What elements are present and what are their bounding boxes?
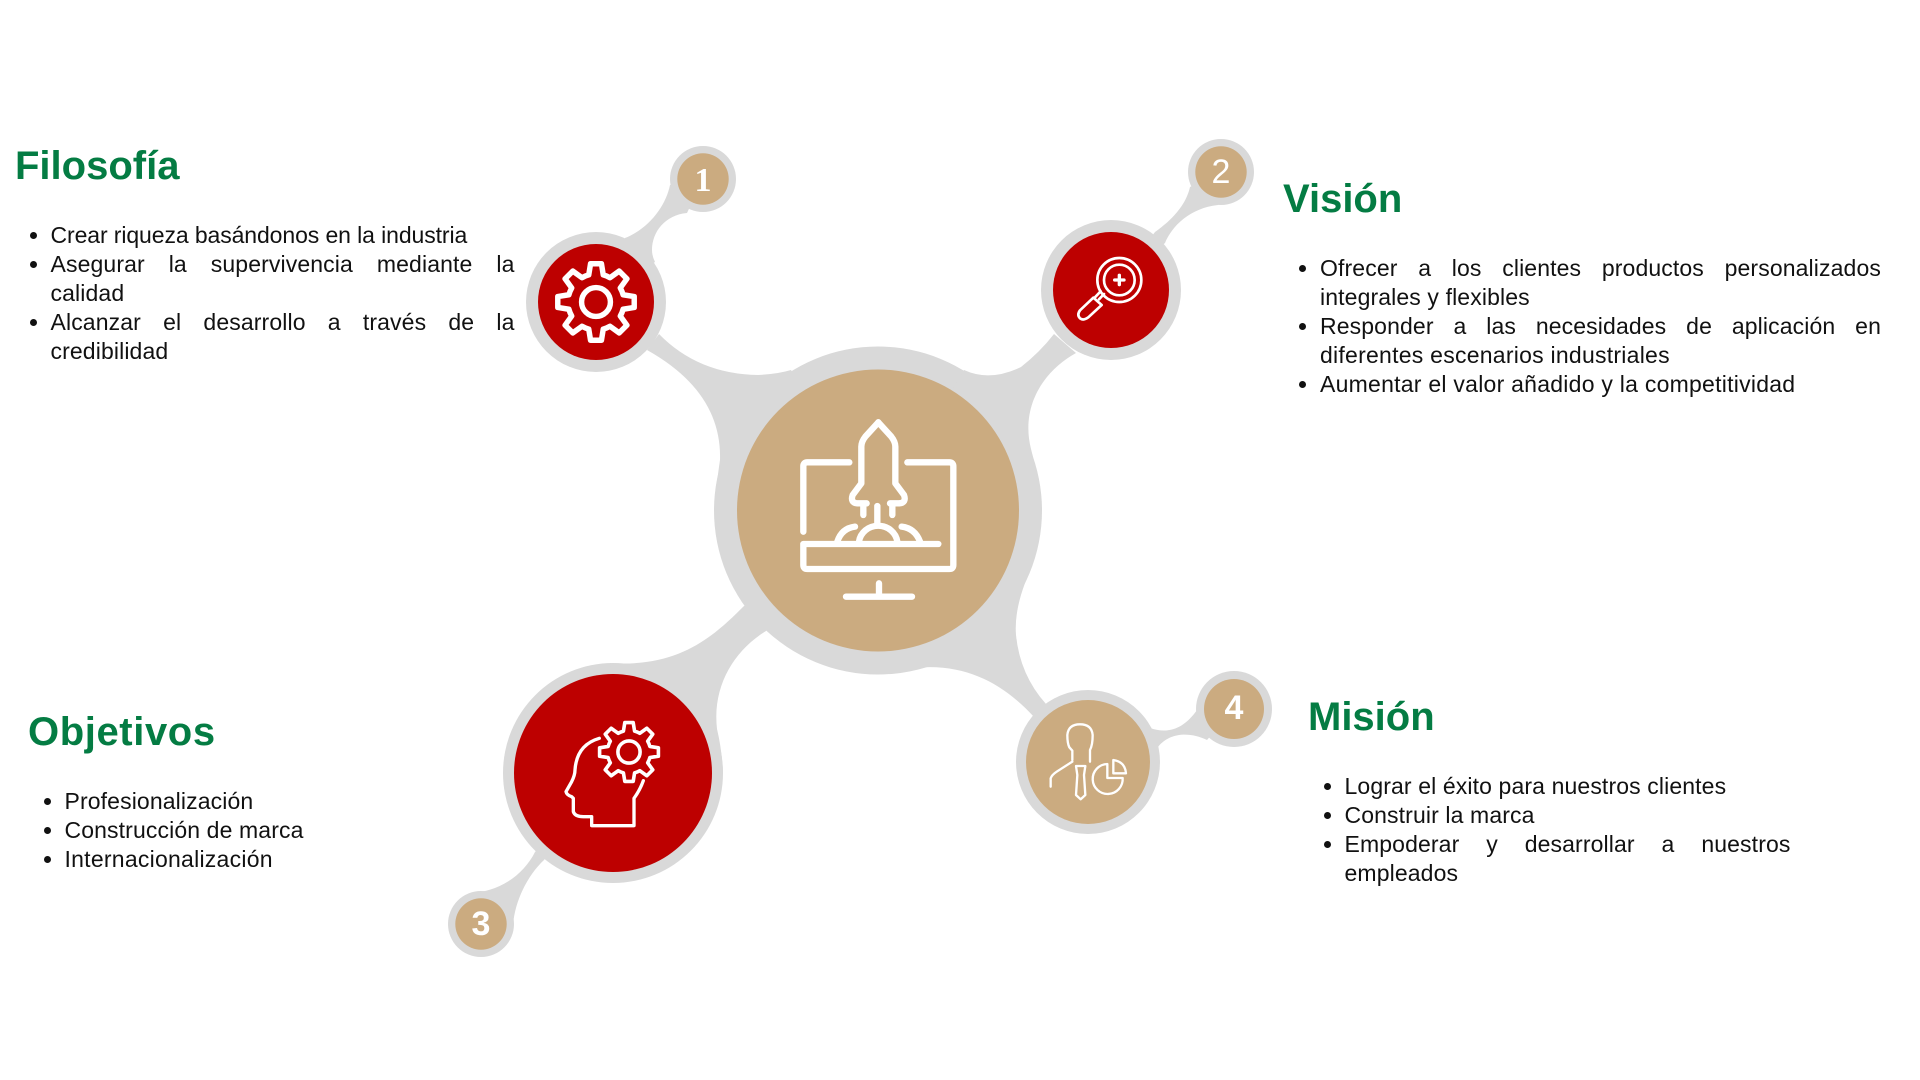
- text block: Visión list: Ofrecer a los clientes productos personalizados: [1320, 255, 1881, 281]
- heading: Objetivos: Objetivos: [28, 710, 216, 754]
- icon: rocket launching from monitor: [803, 422, 953, 597]
- text block: Filosofía list: [30, 222, 514, 364]
- icon: gear: [558, 264, 634, 340]
- heading: Visión: Visión: [1283, 177, 1402, 221]
- text block: Objetivos list: Profesionalización: [64, 788, 253, 814]
- icon: person and pie chart: [1051, 724, 1126, 799]
- node 2: magnifier icon: [1053, 232, 1169, 348]
- icon: head with gear: [566, 723, 658, 826]
- badge 3: 3: [472, 905, 490, 943]
- text block: Visión list: Responder a las necesidades de aplicación en: [1320, 313, 1881, 339]
- node 3: head with gear icon: [514, 674, 712, 872]
- badge 1: 1: [694, 162, 712, 199]
- icon: magnifying glass: [1078, 258, 1141, 319]
- node 4: businessperson with pie chart icon: [1026, 700, 1150, 824]
- grey connector network: [448, 139, 1272, 957]
- text block: Objetivos list: Internacionalización: [64, 846, 273, 872]
- text block: Misión list: Empoderar y desarrollar a nuestros: [1344, 831, 1790, 857]
- text block: Filosofía list: Crear riqueza basándonos en la industria: [50, 222, 467, 248]
- badge 4: 4: [1225, 689, 1244, 727]
- badge 1: [677, 153, 729, 205]
- text block: Filosofía list: Alcanzar el desarrollo a través de la: [50, 309, 514, 335]
- text block: Objetivos list: Construcción de marca: [64, 817, 304, 843]
- text block: Objetivos list: [44, 788, 304, 872]
- text block: Visión list: integrales y flexibles: [1320, 284, 1530, 310]
- badge 3: [455, 898, 507, 950]
- text block: Filosofía list: credibilidad: [50, 338, 168, 364]
- text block: Misión list: empleados: [1344, 860, 1458, 886]
- text block: Visión list: diferentes escenarios industriales: [1320, 342, 1670, 368]
- badge 2: 2: [1212, 153, 1230, 191]
- heading: Misión: Misión: [1308, 695, 1435, 739]
- text block: Visión list: [1299, 255, 1881, 397]
- badge 4: [1204, 679, 1264, 739]
- text block: Visión list: Aumentar el valor añadido y la competitividad: [1320, 371, 1795, 397]
- text block: Misión list: Lograr el éxito para nuestros clientes: [1344, 773, 1726, 799]
- central circle with rocket and monitor icon: [737, 370, 1019, 652]
- text block: Filosofía list: Asegurar la supervivencia mediante la: [50, 251, 514, 277]
- text block: Filosofía list: calidad: [50, 280, 124, 306]
- badge 2: [1195, 146, 1247, 198]
- node 1: gear icon: [538, 244, 654, 360]
- text block: Misión list: [1324, 773, 1790, 886]
- heading: Filosofía: Filosofía: [15, 144, 179, 188]
- text block: Misión list: Construir la marca: [1344, 802, 1535, 828]
